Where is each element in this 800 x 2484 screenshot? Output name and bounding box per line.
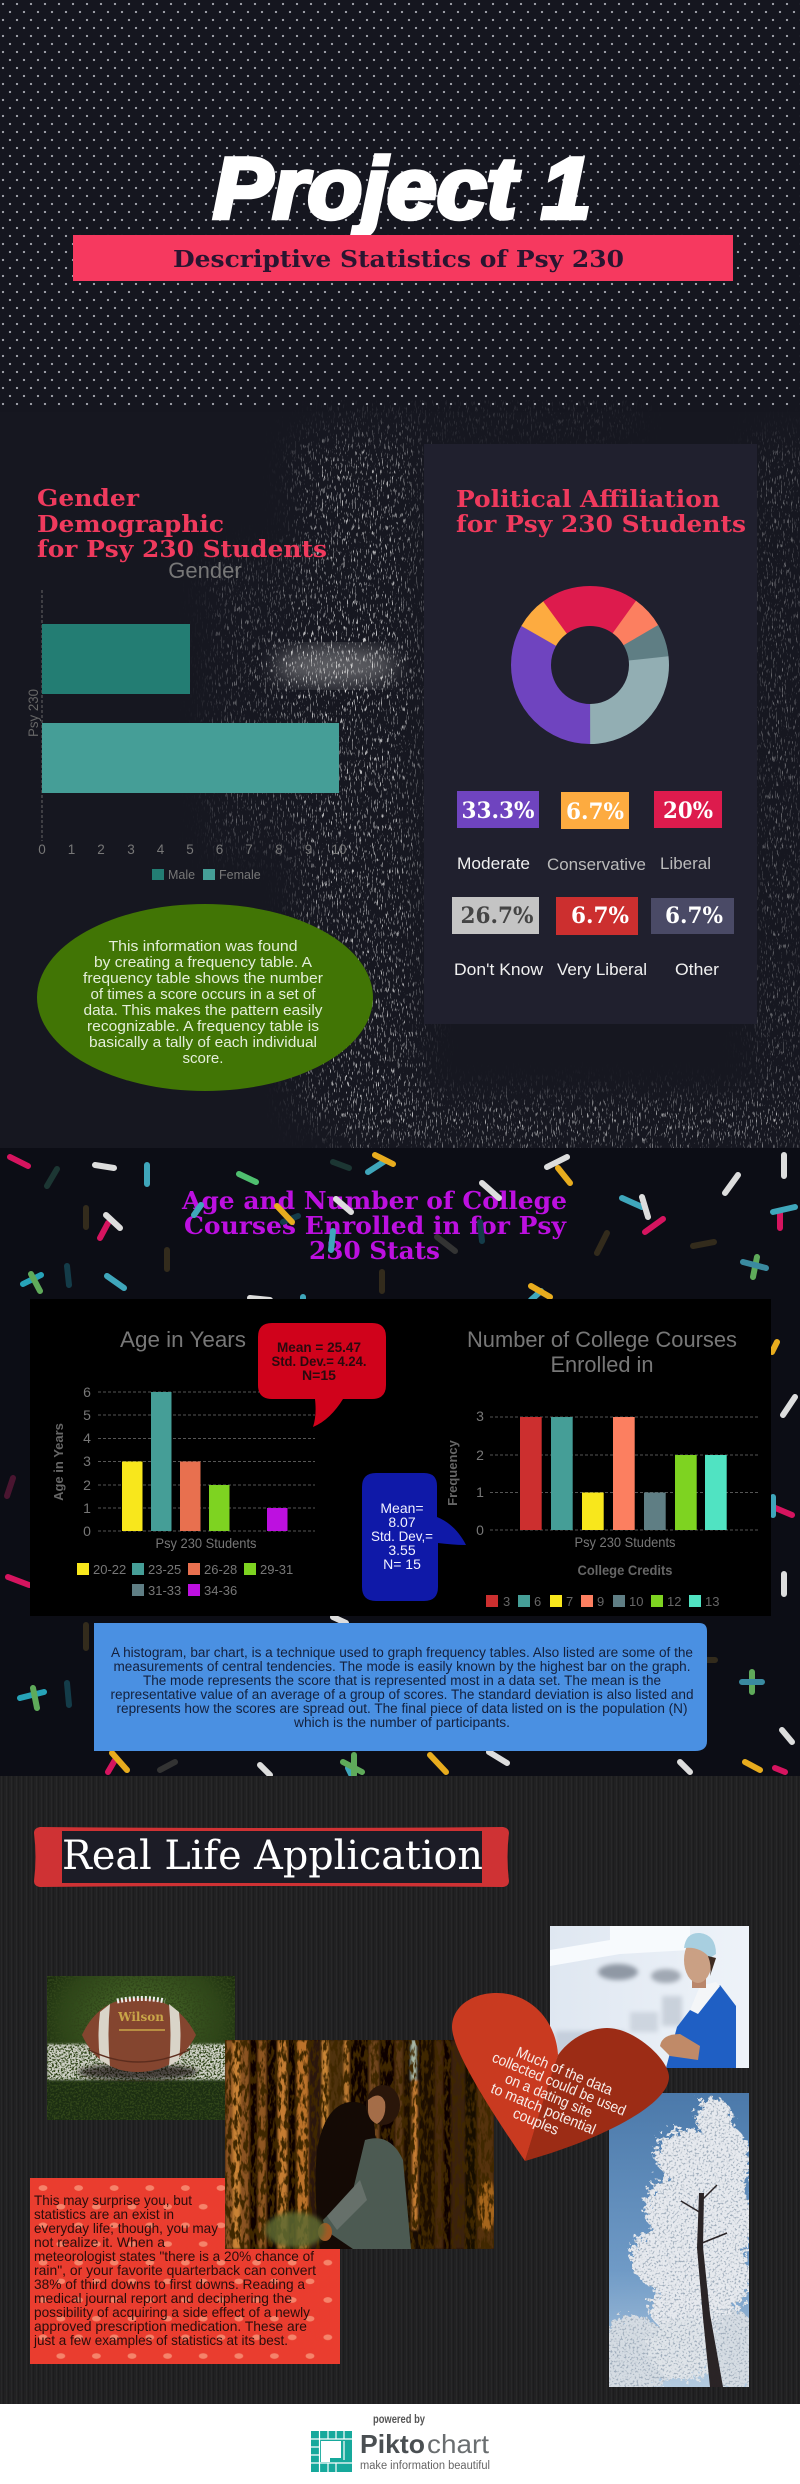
text block: histogram explanation: which is the number of participants. bbox=[293, 1715, 510, 1730]
bar chart: age in years: 1 bbox=[83, 1500, 91, 1516]
subtitle banner bbox=[73, 235, 733, 281]
icon: heart with dating site note bbox=[452, 1993, 669, 2161]
bar chart: age in years: Age in Years bbox=[120, 1327, 246, 1352]
text block: histogram explanation: representative value of an average of a group of scores. The standard deviation is also listed and bbox=[110, 1687, 694, 1702]
text block: statistics in everyday life: rain", or your favorite quarterback can convert bbox=[34, 2262, 316, 2278]
donut chart bbox=[508, 583, 672, 747]
x axis labels: 9 bbox=[305, 842, 312, 857]
callout: course statistics: N= 15 bbox=[383, 1556, 421, 1572]
stat: other: Other bbox=[675, 961, 720, 979]
legend bbox=[152, 868, 261, 882]
heading: gender demographic: Gender bbox=[37, 485, 140, 512]
callout: frequency table explanation: This information was found bbox=[108, 938, 298, 955]
stat: liberal bbox=[654, 791, 722, 873]
stat: don't know: 26.7% bbox=[460, 903, 534, 929]
callout: frequency table explanation: data. This makes the pattern easily bbox=[84, 1002, 323, 1019]
footer bbox=[0, 2404, 800, 2484]
text block: statistics in everyday life: 38% of third downs to first downs. Reading a bbox=[34, 2276, 305, 2292]
bar chart: college courses: 3 bbox=[503, 1594, 510, 1609]
bar chart: age in years: 34-36 bbox=[204, 1583, 237, 1598]
text block: statistics in everyday life bbox=[30, 2178, 340, 2364]
bar chart: college courses: 3 bbox=[476, 1408, 484, 1424]
bar chart: age in years: 4 bbox=[83, 1430, 91, 1446]
axis label: Psy 230 bbox=[25, 689, 41, 737]
bar chart: college courses: 13 bbox=[705, 1594, 719, 1609]
heading: gender demographic bbox=[37, 485, 327, 563]
callout: age statistics: N=15 bbox=[302, 1367, 336, 1383]
text block: histogram explanation: The mode represents the score that is represented most in a data set. The mean is the bbox=[143, 1673, 661, 1688]
callout: frequency table explanation: by creating a frequency table. A bbox=[94, 954, 312, 971]
bar chart: age in years bbox=[51, 1327, 315, 1598]
stat: other bbox=[651, 898, 734, 979]
callout: age statistics bbox=[258, 1323, 386, 1427]
bar chart: age in years: 3 bbox=[83, 1453, 91, 1469]
icon: heart with dating site note: to match potential bbox=[488, 2080, 598, 2139]
bar chart: age in years: 29-31 bbox=[260, 1562, 293, 1577]
callout: age statistics: Mean = 25.47 bbox=[277, 1339, 361, 1355]
stat: moderate bbox=[457, 791, 539, 873]
text block: statistics in everyday life: statistics are an exist in bbox=[34, 2206, 174, 2222]
stat: very liberal: Very Liberal bbox=[557, 961, 647, 979]
bar chart: age in years: Psy 230 Students bbox=[156, 1535, 256, 1551]
bar chart: college courses bbox=[445, 1327, 760, 1609]
bar chart: age in years: 5 bbox=[83, 1407, 91, 1423]
confetti background bbox=[7, 1155, 795, 1776]
icon: heart with dating site note: collected could be used bbox=[490, 2049, 628, 2120]
text block: histogram explanation bbox=[94, 1623, 707, 1751]
bar chart: college courses: Frequency bbox=[445, 1439, 460, 1506]
powered by label: powered by bbox=[373, 2414, 425, 2426]
x axis labels: 8 bbox=[275, 842, 283, 857]
bar: female bbox=[42, 723, 339, 793]
x axis labels: 1 bbox=[68, 842, 75, 857]
heading: age and number of college courses: Courses Enrolled in for Psy bbox=[184, 1211, 567, 1240]
x axis labels: 4 bbox=[157, 842, 165, 857]
text block: statistics in everyday life: meteorologist states "there is a 20% chance of bbox=[34, 2248, 314, 2264]
text block: statistics in everyday life: everyday life; though, you may bbox=[34, 2220, 218, 2236]
callout: frequency table explanation: basically a tally of each individual bbox=[89, 1034, 317, 1051]
callout: frequency table explanation: recognizable. A frequency table is bbox=[87, 1018, 319, 1035]
section background: real life application bbox=[0, 1776, 800, 2404]
text block: statistics in everyday life: just a few examples of statistics at its best. bbox=[33, 2332, 288, 2348]
callout: age statistics: Std. Dev.= 4.24. bbox=[272, 1353, 366, 1369]
stat: moderate: Moderate bbox=[457, 855, 530, 873]
header section background bbox=[0, 0, 800, 412]
stat: don't know bbox=[452, 897, 543, 979]
bar chart: age in years: 23-25 bbox=[148, 1562, 181, 1577]
x axis labels: 7 bbox=[245, 842, 253, 857]
panel: histograms bbox=[30, 1299, 771, 1616]
stat: liberal: Liberal bbox=[660, 855, 711, 873]
text block: statistics in everyday life: possibility of acquiring a side effect of a newly bbox=[34, 2304, 310, 2320]
heading: political affiliation: Political Affiliation bbox=[456, 486, 720, 513]
section background: age and courses bbox=[0, 1148, 800, 1776]
heading: real life application bbox=[34, 1827, 509, 1887]
callout: frequency table explanation: score. bbox=[182, 1050, 224, 1067]
bar chart: college courses: 12 bbox=[667, 1594, 681, 1609]
x axis labels bbox=[38, 842, 347, 857]
bar chart: college courses: 6 bbox=[534, 1594, 541, 1609]
icon: heart with dating site note: on a dating site bbox=[503, 2070, 595, 2121]
bar chart: age in years: 31-33 bbox=[148, 1583, 181, 1598]
icon: heart with dating site note: couples bbox=[510, 2105, 561, 2139]
bar chart: college courses: 10 bbox=[629, 1594, 643, 1609]
stat: very liberal bbox=[556, 897, 647, 979]
x axis labels: 0 bbox=[38, 842, 46, 857]
callout: frequency table explanation bbox=[37, 904, 373, 1091]
photo: couple in forest bbox=[225, 2040, 494, 2249]
stat: liberal: 20% bbox=[663, 798, 713, 824]
bar chart: college courses: 9 bbox=[597, 1594, 604, 1609]
couple figures bbox=[316, 2085, 411, 2249]
x axis labels: 3 bbox=[127, 842, 135, 857]
heading: real life application: Real Life Application bbox=[62, 1833, 483, 1879]
photo: football: Wilson bbox=[117, 2010, 164, 2024]
icon: heart with dating site note: Much of the data bbox=[513, 2044, 616, 2099]
heading: gender demographic: Demographic bbox=[37, 511, 224, 538]
stat: conservative bbox=[547, 792, 646, 874]
stat: conservative: 6.7% bbox=[566, 799, 624, 825]
callout: course statistics bbox=[362, 1473, 466, 1601]
subtitle banner: Descriptive Statistics of Psy 230 bbox=[173, 246, 624, 273]
bar chart: age in years: 6 bbox=[83, 1384, 91, 1400]
x axis labels: 6 bbox=[216, 842, 223, 857]
wordmark: Pikto bbox=[360, 2429, 425, 2459]
callout: frequency table explanation: frequency table shows the number bbox=[83, 970, 323, 987]
stat: other: 6.7% bbox=[665, 903, 723, 929]
bar chart: college courses: 7 bbox=[566, 1594, 573, 1609]
photo: doctor bbox=[550, 1926, 749, 2068]
heading: political affiliation bbox=[456, 486, 746, 538]
title: Project 1 bbox=[213, 141, 591, 237]
callout: course statistics: 8.07 bbox=[388, 1514, 416, 1530]
heading: age and number of college courses bbox=[181, 1186, 567, 1265]
legend: Female bbox=[219, 868, 261, 882]
text block: statistics in everyday life: not realize it. When a bbox=[34, 2234, 165, 2250]
stat: moderate: 33.3% bbox=[462, 798, 535, 824]
photo: football bbox=[47, 1976, 235, 2120]
icon: piktochart logo bbox=[311, 2431, 352, 2472]
text block: statistics in everyday life: approved prescription medication. These are bbox=[34, 2318, 307, 2334]
bar chart: college courses: Number of College Courses bbox=[467, 1327, 737, 1352]
stat: very liberal: 6.7% bbox=[571, 903, 629, 929]
x axis labels: 2 bbox=[97, 842, 105, 857]
x axis labels: 5 bbox=[186, 842, 194, 857]
heading: age and number of college courses: 230 Stats bbox=[309, 1236, 440, 1265]
text block: histogram explanation: represents how the scores are spread out. The final piece of data listed on is the population (N) bbox=[116, 1701, 687, 1716]
bar chart: age in years: 26-28 bbox=[204, 1562, 237, 1577]
bar: male bbox=[42, 624, 190, 694]
text block: statistics in everyday life: This may surprise you, but bbox=[34, 2192, 192, 2208]
heading: political affiliation: for Psy 230 Students bbox=[456, 511, 746, 538]
legend: Male bbox=[168, 868, 195, 882]
callout: course statistics: Mean= bbox=[380, 1500, 424, 1516]
bar chart: age in years: 2 bbox=[83, 1477, 91, 1493]
bar chart: college courses: 1 bbox=[476, 1484, 484, 1500]
callout: frequency table explanation: of times a score occurs in a set of bbox=[90, 986, 316, 1003]
wordmark: make information beautiful bbox=[360, 2460, 490, 2472]
x axis labels: 10 bbox=[331, 842, 347, 857]
wordmark bbox=[360, 2429, 490, 2472]
panel: political affiliation bbox=[424, 444, 757, 1024]
bar chart: gender bbox=[25, 558, 347, 882]
text block: statistics in everyday life: medical journal report and deciphering the bbox=[34, 2290, 292, 2306]
section background: demographics bbox=[0, 412, 800, 1148]
callout: course statistics: Std. Dev,= bbox=[371, 1528, 433, 1544]
bar chart: age in years: Age in Years bbox=[51, 1423, 66, 1501]
bar chart: age in years: 20-22 bbox=[93, 1562, 126, 1577]
stat: conservative: Conservative bbox=[547, 856, 646, 874]
bar chart: college courses: College Credits bbox=[578, 1563, 672, 1578]
wordmark: chart bbox=[427, 2429, 490, 2459]
bar chart: college courses: 0 bbox=[476, 1522, 484, 1538]
photo: snowy tree bbox=[609, 2093, 749, 2387]
bar chart: college courses: 2 bbox=[476, 1447, 484, 1463]
chart title: Gender bbox=[168, 558, 242, 583]
callout: course statistics: 3.55 bbox=[388, 1542, 416, 1558]
bar chart: college courses: Enrolled in bbox=[550, 1352, 654, 1377]
heading: age and number of college courses: Age and Number of College bbox=[181, 1186, 567, 1215]
bar chart: age in years: 0 bbox=[83, 1523, 91, 1539]
bar chart: college courses: Psy 230 Students bbox=[574, 1534, 676, 1550]
text block: histogram explanation: measurements of central tendencies. The mode is easily known by the highest bar on the graph. bbox=[114, 1659, 690, 1674]
text block: histogram explanation: A histogram, bar chart, is a technique used to graph frequency tables. Also listed are some of the bbox=[111, 1645, 693, 1660]
stat: don't know: Don't Know bbox=[454, 961, 543, 979]
heading: gender demographic: for Psy 230 Students bbox=[37, 536, 327, 563]
